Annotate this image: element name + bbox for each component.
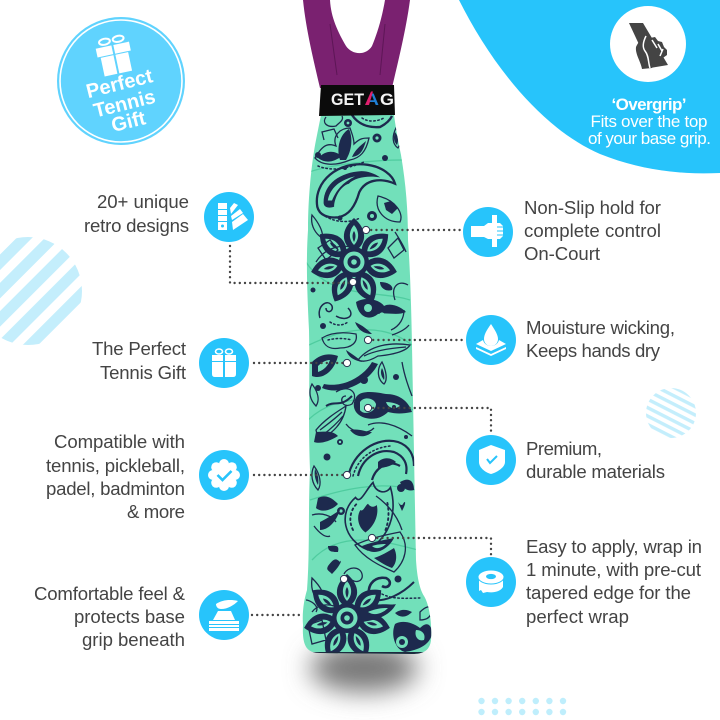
feature: durable: durable materials bbox=[526, 461, 665, 482]
paisley bbox=[317, 164, 395, 217]
feature: moisture bbox=[466, 315, 675, 365]
large flower bbox=[309, 218, 399, 306]
brand text: A bbox=[365, 90, 379, 109]
decorative dots bbox=[478, 698, 566, 715]
central leaf band bbox=[358, 344, 410, 361]
decorative striped circle left bbox=[0, 237, 82, 345]
feature: easy to apply bbox=[466, 536, 702, 627]
feature: durable bbox=[466, 435, 665, 485]
feature: comfort: protects base bbox=[74, 606, 185, 627]
icon: hand holding grip bbox=[610, 6, 686, 82]
feature: compatibility bbox=[46, 431, 249, 522]
badge: perfect tennis gift bbox=[57, 17, 185, 145]
feature: non-slip: On-Court bbox=[524, 243, 601, 264]
icon: shield bbox=[466, 435, 516, 485]
feature: retro designs: retro designs bbox=[84, 215, 189, 236]
feature: compatibility: tennis, pickleball, bbox=[46, 455, 185, 476]
text: overgrip callout bbox=[588, 95, 711, 148]
icon: hand grip bbox=[463, 207, 513, 257]
text: overgrip callout: of your base grip. bbox=[588, 129, 711, 148]
brand text: GET bbox=[331, 90, 365, 109]
badge text bbox=[84, 65, 158, 137]
feature: non-slip: Non-Slip hold for bbox=[524, 197, 661, 218]
black brand band bbox=[319, 85, 395, 116]
feature: non-slip: complete control bbox=[524, 220, 661, 241]
bottom right flower bbox=[393, 622, 432, 652]
icon: gift bbox=[94, 34, 135, 77]
spade leaf bbox=[345, 482, 393, 550]
icon: feather on mattress bbox=[199, 590, 249, 640]
text: overgrip callout: ‘Overgrip’ bbox=[612, 95, 686, 114]
badge text: Perfect bbox=[84, 65, 155, 103]
text: overgrip callout: Fits over the top bbox=[590, 112, 708, 131]
feature: easy to apply: 1 minute, with pre-cut bbox=[526, 559, 702, 580]
racket throat bbox=[303, 0, 410, 88]
feature: compatibility: Compatible with bbox=[54, 431, 185, 452]
lower paisley bbox=[348, 441, 414, 480]
lower floral cluster bbox=[355, 532, 405, 572]
grip with paisley pattern bbox=[302, 115, 432, 654]
feature: comfort: grip beneath bbox=[82, 629, 185, 650]
grip shadow bbox=[310, 644, 418, 692]
grip marker dots bbox=[340, 226, 376, 583]
swirl motifs bbox=[356, 299, 406, 318]
feature: tennis gift: The Perfect bbox=[92, 338, 187, 359]
feature: tennis gift bbox=[92, 338, 249, 388]
feature: non-slip bbox=[463, 197, 661, 264]
feature: easy to apply: Easy to apply, wrap in bbox=[526, 536, 702, 557]
eye flower bbox=[354, 392, 412, 419]
feature: moisture: Mouisture wicking, bbox=[526, 317, 675, 338]
small motifs top bbox=[344, 119, 352, 127]
connectors bbox=[230, 230, 491, 615]
top fan leaf bbox=[315, 128, 369, 169]
icon: colour swatches bbox=[204, 192, 254, 242]
feature: durable: Premium, bbox=[526, 438, 602, 459]
feature: compatibility: padel, badminton bbox=[46, 478, 185, 499]
feature: retro designs: 20+ unique bbox=[97, 191, 189, 212]
icon: water drop on layers bbox=[466, 315, 516, 365]
icon: tape roll bbox=[466, 557, 516, 607]
feature: comfort bbox=[34, 583, 249, 650]
blue corner panel bbox=[459, 0, 720, 173]
racket throat shading bbox=[330, 24, 385, 75]
badge text: Tennis bbox=[91, 86, 158, 122]
feature: comfort: Comfortable feel & bbox=[34, 583, 186, 604]
feature: tennis gift: Tennis Gift bbox=[100, 362, 187, 383]
badge text: Gift bbox=[109, 107, 148, 137]
feature: compatibility: & more bbox=[127, 501, 185, 522]
icon: verified badge bbox=[199, 450, 249, 500]
feature: easy to apply: perfect wrap bbox=[526, 606, 629, 627]
feature: moisture: Keeps hands dry bbox=[526, 340, 661, 361]
bottom flower bbox=[304, 574, 390, 654]
wrap folds bbox=[306, 160, 418, 560]
feature: easy to apply: tapered edge for the bbox=[526, 582, 691, 603]
feature: retro designs bbox=[84, 191, 254, 242]
brand text: G bbox=[380, 90, 394, 109]
brand text bbox=[331, 90, 394, 109]
icon: gift bbox=[199, 338, 249, 388]
decorative striped circle right bbox=[646, 388, 696, 438]
bottom edge bbox=[312, 652, 424, 654]
